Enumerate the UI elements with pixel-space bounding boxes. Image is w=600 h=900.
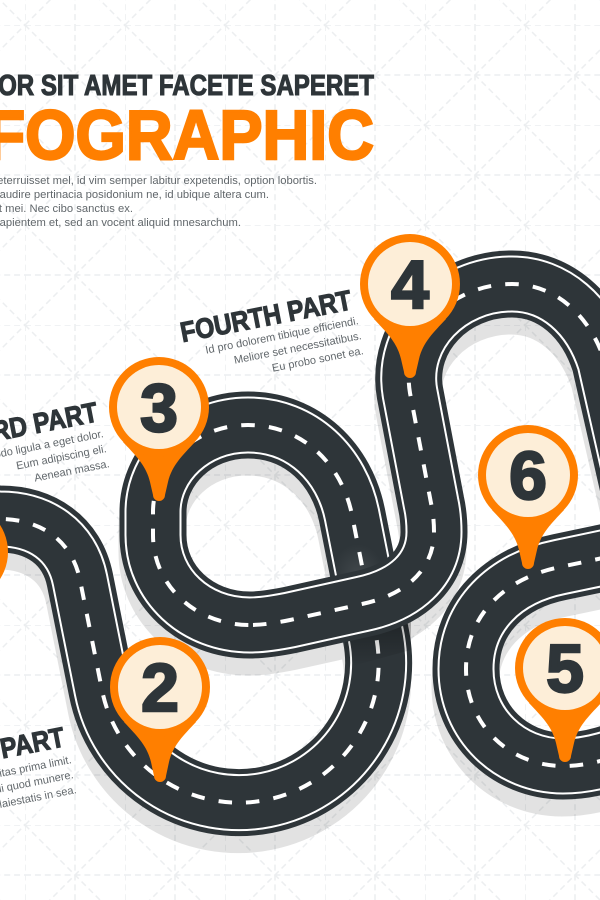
label: fourth part: Id pro dolorem tibique efficiendi. [204, 315, 360, 357]
intro paragraph: audire pertinacia posidonium ne, id ubique altera cum. [0, 189, 269, 201]
label: third part [0, 396, 111, 485]
pin 6 [478, 425, 578, 569]
label: fourth part: FOURTH PART [178, 284, 354, 348]
road: right loop through pins 5 and 6 [466, 546, 600, 766]
label: third part: Eum adipiscing eli. [15, 443, 108, 472]
label: fourth part: Eu probo sonet ea. [271, 345, 365, 375]
pin 2 [110, 637, 210, 782]
pin 4: 4 [391, 247, 429, 323]
pin 2: 2 [141, 650, 179, 726]
road: upper section over the crossing, past pin 4 [249, 284, 600, 625]
pin 3: 3 [140, 370, 178, 446]
intro paragraph [0, 175, 317, 229]
road ground shadow [0, 301, 600, 820]
pin 5 [515, 618, 600, 762]
pin 1 [0, 502, 8, 645]
intro paragraph: deterruisset mel, id vim semper labitur expetendis, option lobortis. [0, 175, 317, 187]
label: second part [0, 721, 78, 812]
crossing light and shade [332, 544, 411, 668]
road: lower section through pin 2 and around loop 3 [0, 425, 379, 803]
label: fourth part [178, 284, 365, 375]
pin 3 [109, 357, 209, 501]
intro paragraph: sapientem et, sed an vocent aliquid mnesarchum. [0, 217, 241, 229]
pin 5: 5 [546, 631, 584, 707]
pin 6: 6 [509, 438, 547, 514]
label: fourth part: Meliore set necessitatibus. [233, 330, 363, 367]
pin 4 [360, 234, 460, 378]
label: third part: Aenean massa. [33, 458, 111, 485]
